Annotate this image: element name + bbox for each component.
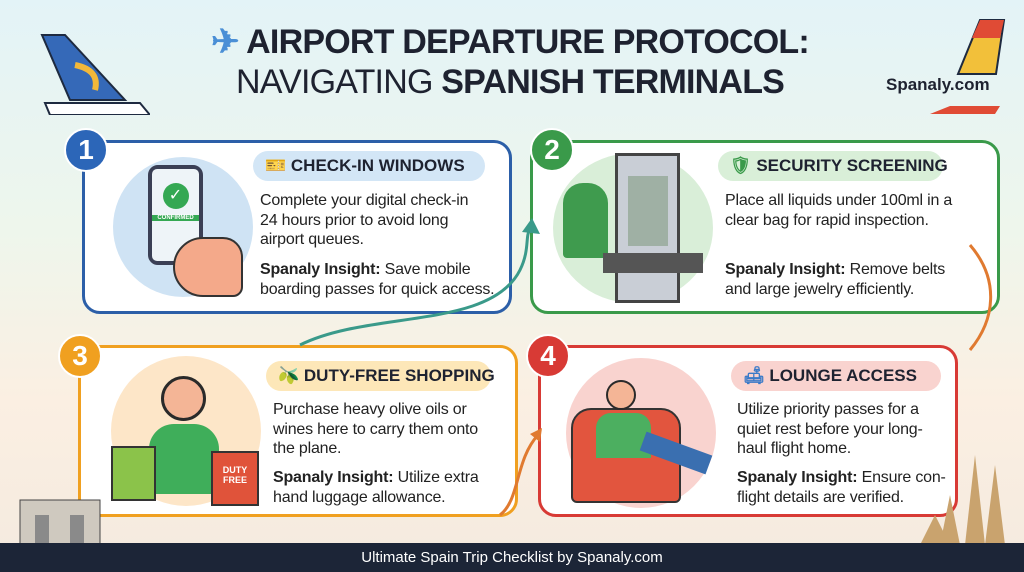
illustration: shopper: DUTY FREE <box>223 465 247 485</box>
header pill <box>253 151 485 181</box>
tail: left plane <box>40 34 150 115</box>
insight: Spanaly Insight: Remove belts and large jewelry efficiently. <box>725 261 945 298</box>
badge 3: 3 <box>72 340 88 371</box>
header pill <box>718 151 943 181</box>
panel: lounge access <box>538 345 958 517</box>
badge 2 <box>530 128 574 172</box>
header pill: 🛋 LOUNGE ACCESS <box>743 366 917 385</box>
insight: Spanaly Insight: Save mobile boarding passes for quick access. <box>260 261 494 298</box>
landmark: sagrada familia <box>921 456 1005 543</box>
badge 4 <box>526 334 570 378</box>
title <box>211 23 809 101</box>
text: Complete your digital check-in 24 hours prior to avoid long airport queues. <box>260 192 468 248</box>
badge 3 <box>58 334 102 378</box>
brand: Spanaly.com <box>886 75 990 94</box>
tail: right plane <box>930 19 1006 114</box>
title: NAVIGATING SPANISH TERMINALS <box>236 63 784 101</box>
text: Utilize priority passes for a quiet rest before your long-haul flight home. <box>737 401 923 457</box>
illustration: scanner <box>553 153 713 303</box>
header pill <box>266 361 491 391</box>
arrow: 3 to 4 <box>499 428 542 516</box>
badge 4: 4 <box>540 340 556 371</box>
illustration: shopper <box>111 356 261 506</box>
text: Purchase heavy olive oils or wines here to carry them onto the plane. <box>273 401 478 457</box>
insight: Spanaly Insight: Utilize extra hand luggage allowance. <box>273 469 479 506</box>
arrow: 1 to 2 <box>299 218 540 346</box>
insight: Spanaly Insight: Ensure con-flight details are verified. <box>737 469 946 506</box>
landmark: left gate <box>20 500 100 543</box>
header pill <box>731 361 941 391</box>
badge 1 <box>64 128 108 172</box>
arrow: 2 to 4 <box>968 244 992 351</box>
title: ✈ AIRPORT DEPARTURE PROTOCOL: <box>211 23 809 61</box>
footer: Ultimate Spain Trip Checklist by Spanaly.com <box>361 549 663 566</box>
badge 1: 1 <box>78 134 94 165</box>
illustration: phone in hand: ✓ <box>169 187 182 204</box>
panel: check-in windows <box>82 140 512 314</box>
text: Place all liquids under 100ml in a clear bag for rapid inspection. <box>725 192 952 228</box>
badge 2: 2 <box>544 134 560 165</box>
panel: security screening <box>530 140 1000 314</box>
illustration: phone in hand <box>113 157 253 297</box>
header pill: 🛡 SECURITY SCREENING <box>730 156 948 175</box>
panel: duty-free shopping <box>78 345 518 517</box>
header pill: 🎫 CHECK-IN WINDOWS <box>265 156 465 175</box>
header pill: 🫒 DUTY-FREE SHOPPING <box>278 366 495 385</box>
illustration: phone in hand: CONFIRMED <box>157 215 194 221</box>
illustration: lounge <box>566 358 716 508</box>
footer <box>0 543 1024 572</box>
